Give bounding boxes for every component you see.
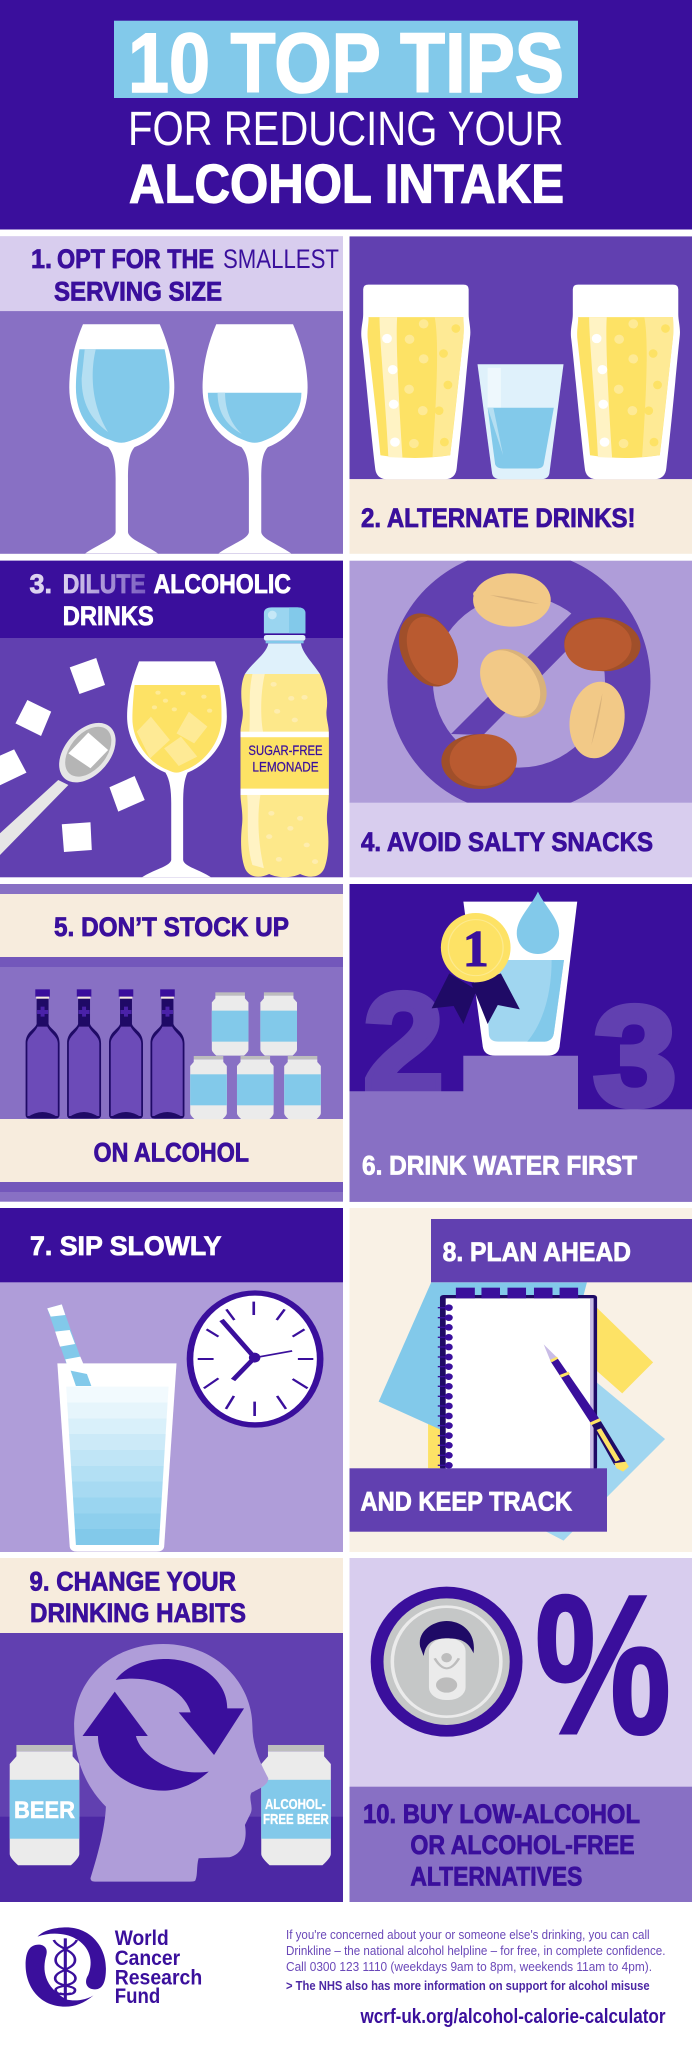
logo text: Fund xyxy=(115,1985,160,2008)
icon: water glass with drop and medal xyxy=(432,892,577,1056)
heading 1: OPT FOR THE xyxy=(57,244,214,274)
panel 3: dilute alcoholic drinks xyxy=(0,561,343,877)
icon: clock xyxy=(187,1290,323,1428)
panel 5: don't stock up on alcohol xyxy=(0,884,343,1202)
helpline text: If you're concerned about your or someone else's drinking, you can call xyxy=(286,1927,650,1942)
logo mark xyxy=(26,1927,106,2007)
heading band 8b xyxy=(350,1468,607,1532)
heading 1: SERVING SIZE xyxy=(54,276,222,306)
heading 1 xyxy=(31,244,339,306)
icon: sugar cubes and spoon xyxy=(0,658,145,855)
heading band 8a xyxy=(431,1219,692,1282)
heading 10 xyxy=(363,1799,640,1892)
bottle label: SUGAR-FREE xyxy=(248,742,323,758)
heading 5a: 5. DON’T STOCK UP xyxy=(54,912,289,942)
logo text: Research xyxy=(115,1966,202,1989)
heading 5b: ON ALCOHOL xyxy=(94,1138,249,1168)
heading 10: ALTERNATIVES xyxy=(410,1862,582,1892)
heading 1: SMALLEST xyxy=(223,244,339,274)
heading 10: 10. BUY LOW-ALCOHOL xyxy=(363,1799,640,1829)
helpline text: Call 0300 123 1110 (weekdays 9am to 8pm, weekends 11am to 4pm). xyxy=(286,1959,652,1974)
can label: alcohol-free beer: ALCOHOL- xyxy=(265,1797,326,1813)
heading 3: DRINKS xyxy=(63,601,154,631)
icon: bottles and cans xyxy=(26,989,321,1119)
icon: no-sign with nuts xyxy=(387,550,650,813)
icon: glass with straw xyxy=(47,1304,177,1552)
icon: wine glasses xyxy=(69,324,308,554)
can label: beer: BEER xyxy=(14,1797,75,1824)
heading 3: ALCOHOLIC xyxy=(154,569,291,599)
panel 9: change your drinking habits xyxy=(0,1558,343,1902)
heading 3: 3. xyxy=(30,569,52,599)
heading 9: DRINKING HABITS xyxy=(30,1598,246,1628)
panel 8: plan ahead and keep track xyxy=(350,1208,692,1552)
heading 1: 1. xyxy=(31,244,52,274)
icon: wine glass with lemonade xyxy=(127,661,227,877)
heading 10: OR ALCOHOL-FREE xyxy=(410,1830,635,1860)
header: title block xyxy=(0,0,692,230)
icon: lemonade bottle xyxy=(241,607,329,877)
bottle label xyxy=(248,742,323,775)
panel 4: avoid salty snacks xyxy=(350,550,692,877)
logo text xyxy=(115,1927,202,2008)
heading 6: 6. DRINK WATER FIRST xyxy=(362,1151,637,1181)
heading 2: 2. ALTERNATE DRINKS! xyxy=(361,503,636,533)
heading 9 xyxy=(30,1567,246,1628)
heading 3: DILUTE xyxy=(63,569,146,599)
can label: alcohol-free beer: FREE BEER xyxy=(263,1812,329,1828)
podium number 2: 2 xyxy=(363,964,444,1123)
icon: can top xyxy=(371,1587,522,1737)
panel 7: sip slowly xyxy=(0,1208,343,1552)
title line 2: FOR REDUCING YOUR xyxy=(128,103,564,156)
bottle label: LEMONADE xyxy=(252,759,319,775)
panel 1: smallest serving size xyxy=(0,236,343,554)
podium number 3: 3 xyxy=(593,977,677,1136)
helpline text xyxy=(286,1927,666,1974)
icon: pints and water glass xyxy=(361,285,680,479)
panel 6: drink water first xyxy=(350,884,692,1202)
title line 3: ALCOHOL INTAKE xyxy=(129,152,564,214)
medal number: 1 xyxy=(463,921,489,978)
logo text: World xyxy=(115,1927,169,1950)
can label: alcohol-free beer xyxy=(263,1797,329,1828)
footer xyxy=(26,1927,666,2028)
heading 4: 4. AVOID SALTY SNACKS xyxy=(361,827,653,857)
panel 2: alternate drinks xyxy=(350,236,692,554)
title line 1: 10 TOP TIPS xyxy=(128,16,564,110)
podium xyxy=(350,1056,692,1202)
panel 10: low-alcohol alternatives xyxy=(350,1554,692,1902)
icon: notebook and pen xyxy=(379,1282,665,1541)
heading 9: 9. CHANGE YOUR xyxy=(30,1567,236,1597)
logo text: Cancer xyxy=(115,1947,180,1970)
icon: head with arrows and cans xyxy=(10,1644,331,1882)
heading 7: 7. SIP SLOWLY xyxy=(30,1231,222,1261)
heading 3 xyxy=(30,569,291,631)
heading 8b: AND KEEP TRACK xyxy=(360,1487,572,1517)
heading 8a: 8. PLAN AHEAD xyxy=(443,1237,631,1267)
